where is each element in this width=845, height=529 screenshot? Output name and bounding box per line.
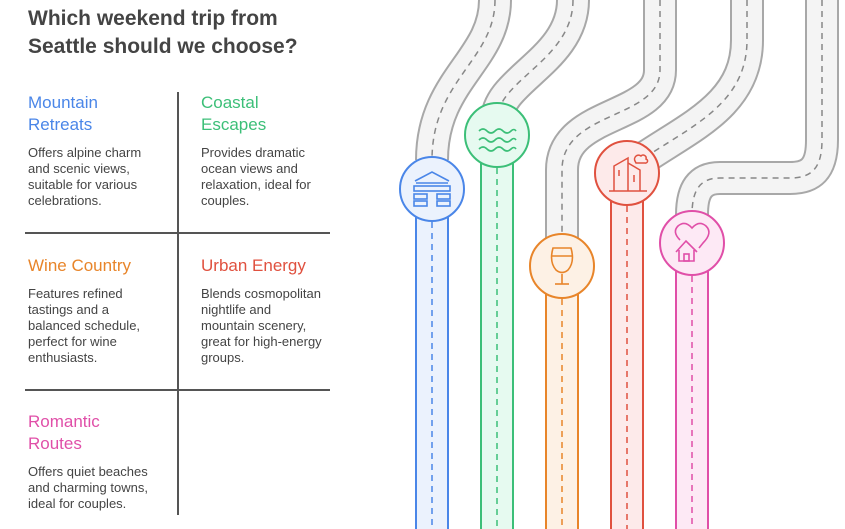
panel: urban energy: great for high-energy: [201, 334, 322, 349]
icon: city buildings: [595, 141, 659, 205]
panel: mountain retreats: Retreats: [28, 115, 92, 134]
panel: coastal escapes: Escapes: [201, 115, 266, 134]
icon: wine glass: [530, 234, 594, 298]
panel: urban energy: nightlife and: [201, 302, 271, 317]
panel: mountain retreats: Mountain: [28, 93, 98, 112]
panel: romantic routes: Romantic: [28, 412, 100, 431]
lane: coastal: [481, 135, 513, 529]
title: [28, 7, 298, 58]
panel: wine country: Features refined tastings and a balanced schedule, perfect for wine enthusiasts.: [28, 286, 140, 365]
panel: romantic routes: [28, 412, 148, 511]
panel: urban energy: Blends cosmopolitan: [201, 286, 321, 301]
icon: heart house: [660, 211, 724, 275]
panel: coastal escapes: Coastal: [201, 93, 259, 112]
panel: romantic routes: Routes: [28, 434, 82, 453]
lane: urban: [611, 173, 643, 529]
panel: wine country: Wine Country: [28, 256, 131, 275]
icon: waves: [465, 103, 529, 167]
lane: mountain: [416, 189, 448, 529]
panel: coastal escapes: [201, 93, 311, 208]
panel: urban energy: groups.: [201, 350, 244, 365]
panel: mountain retreats: [28, 93, 141, 208]
title: Which weekend trip from: [28, 7, 278, 30]
panel: urban energy: mountain scenery,: [201, 318, 306, 333]
panel: urban energy: [201, 256, 322, 365]
panel: urban energy: Urban Energy: [201, 256, 306, 275]
panel: mountain retreats: Offers alpine charm and scenic views, suitable for various celebrations.: [28, 145, 141, 208]
panel: coastal escapes: Provides dramatic ocean views and relaxation, ideal for couples.: [201, 145, 311, 208]
title: Seattle should we choose?: [28, 35, 298, 58]
panel: romantic routes: Offers quiet beaches and charming towns, ideal for couples.: [28, 464, 148, 511]
lane: romantic: [676, 243, 708, 529]
lane: wine: [546, 266, 578, 529]
icon: mountain lodge: [400, 157, 464, 221]
